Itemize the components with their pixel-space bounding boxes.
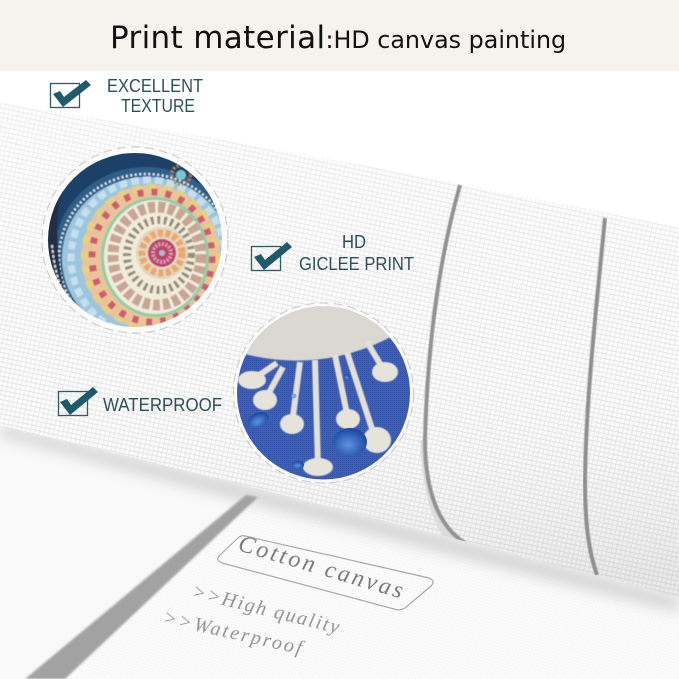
printed label: cotton canvas: Cotton canvas — [235, 531, 409, 605]
detail circle: mandala print — [42, 147, 238, 343]
printed label: cotton canvas — [161, 531, 433, 660]
label: GICLEE PRINT — [299, 254, 414, 274]
feature line: waterproof: >>Waterproof — [161, 606, 307, 660]
title: Print material:HD canvas painting — [110, 20, 566, 56]
outer dots band — [57, 166, 217, 306]
seam 2 — [585, 218, 605, 575]
checkbox icon — [58, 387, 98, 416]
label: WATERPROOF — [103, 395, 222, 415]
seam 1 — [420, 440, 454, 538]
floor canvas sheet — [0, 420, 679, 679]
checkbox icon — [50, 80, 91, 108]
feature line: high quality: >>High quality — [190, 581, 343, 639]
water drops — [245, 374, 367, 469]
callout: excellent texture — [50, 76, 203, 116]
label: TEXTURE — [121, 96, 195, 116]
header band — [0, 0, 679, 71]
light blue scallops — [61, 176, 222, 327]
label — [107, 76, 203, 116]
callout: waterproof — [58, 387, 222, 416]
green ring — [101, 197, 209, 317]
dark left border — [48, 196, 66, 292]
web petals — [113, 207, 201, 305]
ornament top right — [176, 170, 186, 180]
yellow and pink ring — [82, 185, 220, 329]
label: EXCELLENT — [107, 76, 203, 96]
center flower — [142, 233, 182, 273]
roll cast shadow — [0, 425, 679, 612]
checkbox icon — [252, 242, 292, 270]
detail circle: waterproof fabric — [230, 300, 415, 485]
canvas roll — [0, 103, 679, 597]
label — [299, 232, 414, 274]
label: HD — [342, 232, 366, 252]
callout: giclee print — [252, 232, 414, 274]
